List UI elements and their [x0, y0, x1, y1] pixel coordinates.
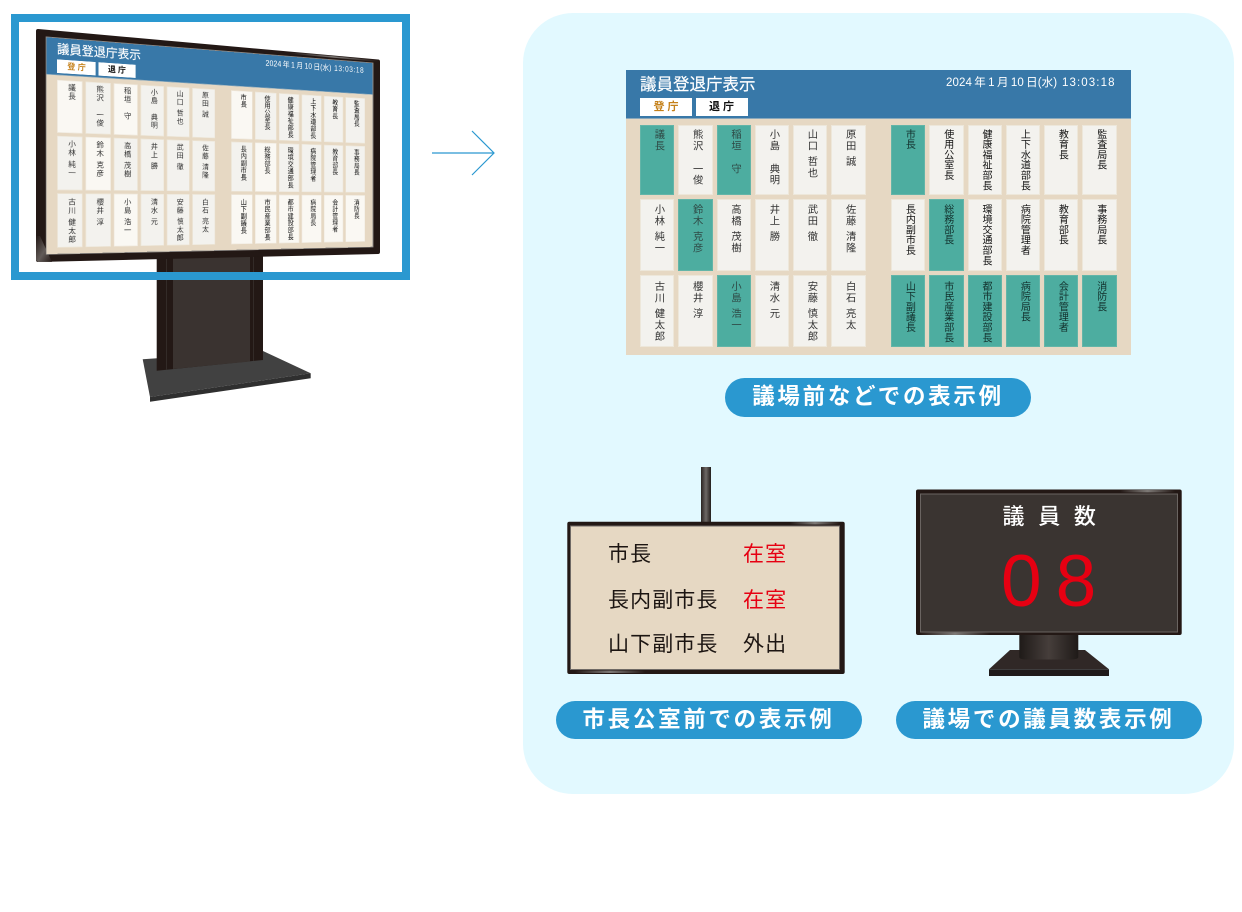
kiosk screen: officials grid: 使用公室長 [263, 95, 270, 130]
board: council members grid: 古川 健太郎 [652, 281, 663, 342]
board: council members grid: 櫻井 淳 [691, 281, 702, 319]
board: officials grid: 会計管理者 [1056, 281, 1067, 332]
kiosk screen title: 議員登退庁表示 [57, 43, 141, 62]
kiosk screen: officials grid: 事務局長 [353, 149, 359, 176]
tab: departure: 退 庁 [108, 65, 126, 75]
nameplate row: mayor deputy Yamashita: 山下副市長 [608, 633, 718, 656]
caption: assembly hall entrance example [725, 378, 1031, 416]
board: officials grid: 都市建設部長 [980, 281, 991, 343]
kiosk screen: council members grid: 清水 元 [149, 198, 157, 226]
nameplate row: mayor deputy Osauchi: 長内副市長 [608, 589, 718, 612]
kiosk screen: officials grid: 会計管理者 [331, 199, 337, 233]
board: council members grid: 小島 典明 [767, 129, 778, 186]
member count heading: 議員数 [1002, 504, 1110, 529]
date and time: 13:03:18 [334, 65, 364, 75]
kiosk screen: officials grid [231, 90, 365, 244]
board: officials grid: 監査局長 [1095, 129, 1106, 170]
kiosk screen: council members grid: 稲垣 守 [122, 87, 130, 121]
board: council members grid: 高橋 茂樹 [729, 204, 740, 254]
board: council members grid: 山口 哲也 [805, 129, 816, 179]
nameplate row: mayor deputy Osauchi [608, 589, 787, 612]
kiosk screen: council members grid: 議長 [66, 83, 75, 101]
board: council members grid [640, 125, 866, 347]
board: council members grid: 小島 浩一 [729, 281, 740, 331]
kiosk screen: council members grid: 小島 浩一 [122, 198, 130, 234]
board: council members grid: 武田 徹 [805, 204, 816, 242]
board: council members grid: 白石 亮太 [844, 281, 855, 331]
board: officials grid: 健康福祉部長 [980, 129, 991, 191]
caption: member count example: 議場での議員数表示例 [922, 706, 1174, 732]
kiosk screen: council members grid: 小島 典明 [149, 88, 157, 130]
board title: 議員登退庁表示 [640, 76, 756, 94]
board: officials grid: 使用公室長 [942, 129, 953, 181]
board: officials grid: 病院局長 [1018, 281, 1029, 322]
board: council members grid: 小林 純一 [652, 204, 663, 254]
tab: departure: 退 庁 [709, 101, 734, 113]
board: council members grid: 井上 勝 [767, 204, 778, 242]
kiosk screen: council members grid [57, 80, 215, 248]
board: council members grid: 佐藤 清隆 [844, 204, 855, 254]
board: officials grid: 市民産業部長 [942, 281, 953, 343]
nameplate row: mayor [608, 543, 787, 566]
board: council members grid: 鈴木 克彦 [691, 204, 702, 254]
kiosk screen: council members grid: 武田 徹 [175, 143, 183, 171]
caption: member count example [896, 700, 1202, 739]
kiosk screen: officials grid: 教育部長 [331, 148, 337, 176]
board: council members grid: 清水 元 [767, 281, 778, 319]
member count monitor stand [989, 635, 1109, 676]
kiosk screen: officials grid: 病院管理者 [309, 148, 315, 182]
kiosk screen: officials grid: 消防長 [353, 199, 359, 219]
nameplate monitor frame [567, 522, 845, 674]
board: council members grid: 熊沢 一俊 [691, 129, 702, 186]
kiosk screen: council members grid: 山口 哲也 [175, 90, 182, 126]
board: officials grid: 病院管理者 [1018, 204, 1029, 256]
tab: arrival [640, 98, 692, 116]
caption: assembly hall entrance example: 議場前などでの表示例 [752, 384, 1004, 409]
board header [626, 70, 1131, 119]
date and time [266, 60, 364, 75]
board: council members grid: 安藤 慎太郎 [805, 281, 816, 342]
kiosk stand [143, 255, 311, 402]
caption: mayor office example [556, 700, 862, 739]
nameplate row: mayor deputy Osauchi: 在室 [743, 589, 787, 612]
board: council members grid: 原田 誠 [844, 129, 855, 168]
date and time: 2024 年 1 月 10 日(水) [946, 77, 1057, 89]
tab: arrival: 登 庁 [67, 62, 86, 73]
arrow: kiosk to examples [432, 130, 495, 176]
kiosk screen: council members grid: 原田 誠 [201, 91, 208, 119]
tab: departure [696, 98, 748, 116]
board: officials grid: 消防長 [1095, 281, 1106, 312]
kiosk screen: officials grid: 監査局長 [353, 100, 359, 127]
board: officials grid: 山下副議長 [903, 281, 914, 332]
tab: arrival [57, 59, 96, 75]
kiosk screen: council members grid: 高橋 茂樹 [122, 142, 130, 178]
nameplate row: mayor: 在室 [743, 543, 787, 566]
board: officials grid [891, 125, 1117, 347]
board: council members grid: 議長 [652, 129, 663, 152]
kiosk screen: officials grid: 市民産業部長 [263, 199, 270, 241]
member count monitor frame [916, 490, 1182, 635]
kiosk screen: council members grid: 古川 健太郎 [66, 198, 75, 244]
nameplate monitor pole [701, 467, 711, 523]
board: officials grid: 市長 [903, 129, 914, 150]
nameplate row: mayor: 市長 [608, 543, 652, 566]
kiosk screen: attendance board (perspective) [46, 37, 373, 254]
kiosk screen: council members grid: 白石 亮太 [201, 198, 208, 233]
board: officials grid: 教育長 [1056, 129, 1067, 160]
kiosk screen: council members grid: 小林 純一 [66, 140, 75, 178]
kiosk screen: officials grid: 市長 [239, 94, 246, 108]
board: officials grid: 教育部長 [1056, 204, 1067, 245]
member count number: 08 [1001, 541, 1110, 622]
kiosk screen: officials grid: 健康福祉部長 [286, 96, 293, 138]
kiosk screen: officials grid: 教育長 [331, 99, 337, 120]
tab: departure [98, 62, 135, 78]
kiosk screen: officials grid: 総務部長 [263, 146, 270, 174]
tab: arrival: 登 庁 [653, 101, 679, 113]
nameplate row: mayor deputy Yamashita: 外出 [743, 633, 787, 656]
kiosk screen: council members grid: 佐藤 清隆 [201, 144, 208, 179]
board: officials grid: 事務局長 [1095, 204, 1106, 245]
kiosk screen: officials grid: 都市建設部長 [286, 199, 293, 240]
kiosk monitor frame [36, 31, 378, 262]
kiosk screen: officials grid: 病院局長 [309, 199, 315, 226]
kiosk screen: council members grid: 安藤 慎太郎 [175, 198, 183, 242]
panel: display examples background [523, 13, 1234, 794]
highlight frame around kiosk screen [11, 14, 410, 280]
kiosk screen: council members grid: 鈴木 克彦 [95, 141, 103, 178]
kiosk screen: council members grid: 井上 勝 [149, 143, 157, 170]
kiosk screen: officials grid: 山下副議長 [239, 198, 246, 234]
nameplate row: mayor deputy Yamashita [608, 633, 787, 656]
board: officials grid: 上下水道部長 [1018, 129, 1029, 191]
kiosk screen: council members grid: 櫻井 淳 [95, 198, 103, 226]
board: officials grid: 総務部長 [942, 204, 953, 245]
kiosk screen header [46, 37, 373, 95]
board: officials grid: 環境交通部長 [980, 204, 991, 266]
kiosk screen: council members grid: 熊沢 一俊 [95, 85, 103, 128]
date and time: 2024 年 1 月 10 日(水) [266, 60, 331, 73]
flat screen: attendance board example [626, 70, 1131, 355]
board: officials grid: 長内副市長 [903, 204, 914, 256]
date and time: 13:03:18 [1062, 77, 1116, 89]
date and time [946, 76, 1116, 89]
caption: mayor office example: 市長公室前での表示例 [582, 706, 834, 732]
kiosk screen: officials grid: 環境交通部長 [286, 147, 293, 189]
board: council members grid: 稲垣 守 [729, 129, 740, 175]
kiosk screen: officials grid: 上下水道部長 [309, 98, 315, 139]
kiosk screen: officials grid: 長内副市長 [239, 145, 246, 181]
